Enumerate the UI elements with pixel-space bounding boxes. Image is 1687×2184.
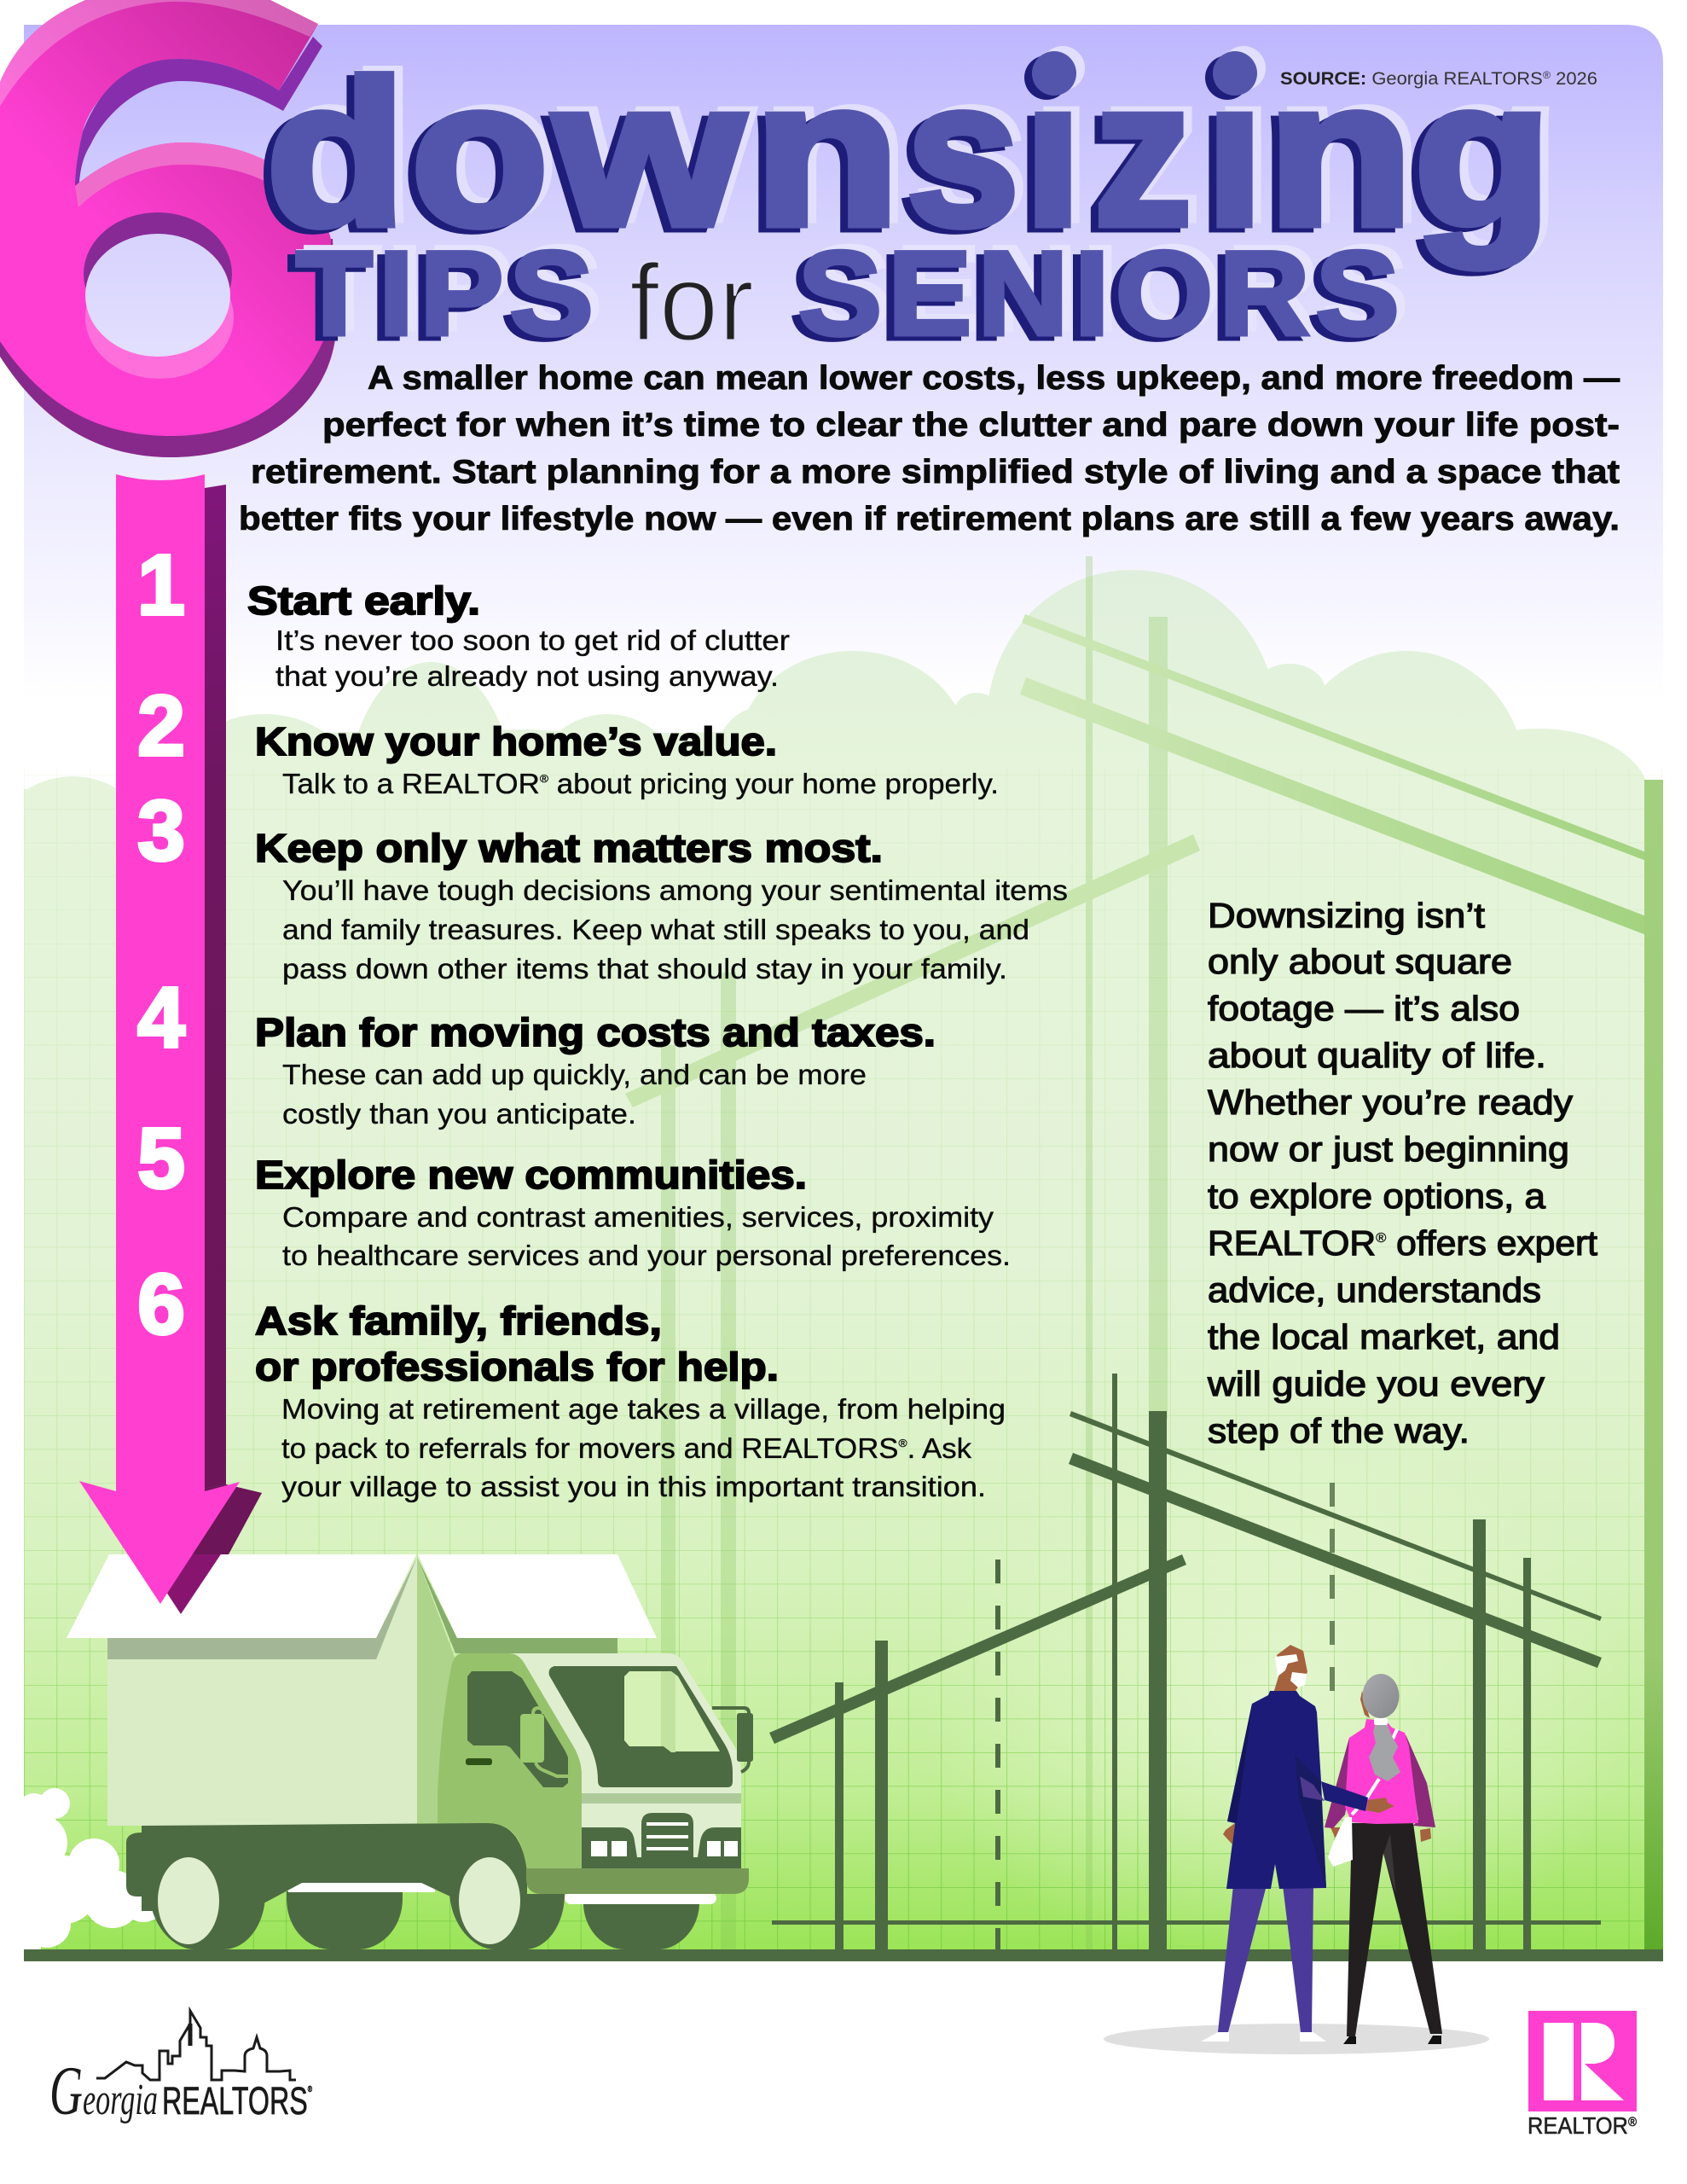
6 hole shading xyxy=(84,212,232,335)
numbers on arrow: 1 xyxy=(137,537,185,633)
tip 3: pass down other items that should stay in your family. xyxy=(282,953,1007,985)
tip 4 xyxy=(255,1010,936,1130)
tip 2: about pricing your home properly. xyxy=(548,768,999,799)
source line: ® xyxy=(1543,69,1551,81)
title: downsizing: i xyxy=(1206,38,1263,269)
left hand xyxy=(1223,1823,1235,1844)
title: downsizing: z xyxy=(1094,38,1191,269)
illustration: older woman xyxy=(1325,1674,1442,2044)
legs xyxy=(1218,1885,1267,2032)
scrunchie xyxy=(1374,1718,1388,1725)
intro paragraph: retirement. Start planning for a more simplified style of living and a space that xyxy=(251,454,1620,491)
box right face xyxy=(417,1557,455,1823)
closing paragraph: offers expert xyxy=(1386,1223,1598,1263)
title: downsizing: o xyxy=(411,38,548,269)
tip 6: . Ask xyxy=(907,1432,972,1464)
closing paragraph xyxy=(1207,896,1598,1450)
numbers on arrow: 2 xyxy=(137,678,185,774)
title: downsizing: n xyxy=(1267,38,1413,269)
box flaps xyxy=(67,1554,416,1638)
closing paragraph: only about square xyxy=(1208,942,1512,981)
illustration: older man xyxy=(1201,1645,1394,2042)
cab side xyxy=(438,1653,582,1868)
tip 2: Talk to a REALTOR xyxy=(282,768,525,799)
dashed frame line right xyxy=(1330,1483,1335,1693)
numbers on arrow: 4 xyxy=(137,970,185,1066)
tip 1 xyxy=(247,578,790,692)
box right shade xyxy=(417,1557,617,1653)
front wheel xyxy=(449,1857,565,1949)
coat shading xyxy=(1227,1704,1252,1822)
tip 3: Keep only what matters most. xyxy=(255,826,883,870)
closing paragraph: Whether you’re ready xyxy=(1208,1083,1574,1122)
rear wheel xyxy=(149,1857,265,1949)
tip 2: ® xyxy=(540,772,548,785)
tip 5: Compare and contrast amenities, services, proximity xyxy=(282,1201,994,1233)
6 shadow xyxy=(0,239,336,457)
closing paragraph: footage — it’s also xyxy=(1208,989,1520,1028)
windshield glass xyxy=(624,1671,720,1751)
heels xyxy=(1343,2036,1356,2044)
skyline xyxy=(96,2011,296,2080)
title: TIPS for SENIORS: SENIORS xyxy=(798,226,1406,360)
tip 6: or professionals for help. xyxy=(255,1345,779,1389)
downward arrow xyxy=(79,474,262,1614)
side window xyxy=(467,1671,568,1787)
intro paragraph: A smaller home can mean lower costs, less upkeep, and more freedom — xyxy=(368,360,1620,397)
chassis xyxy=(126,1823,527,1911)
dark house frame xyxy=(769,1374,1602,1957)
6 body xyxy=(0,0,332,436)
grille base xyxy=(582,1813,741,1869)
numbers on arrow xyxy=(137,537,185,1352)
intro paragraph: perfect for when it’s time to clear the clutter and pare down your life post- xyxy=(322,407,1620,444)
tip 1: It’s never too soon to get rid of clutter xyxy=(275,624,790,656)
side mirror xyxy=(712,1708,753,1772)
ground shadow under couple xyxy=(1104,2024,1489,2054)
logo: Georgia REALTORS xyxy=(49,2011,312,2129)
tip 3: You’ll have tough decisions among your sentimental items xyxy=(282,874,1068,906)
arm xyxy=(1321,1781,1368,1811)
front band xyxy=(582,1793,741,1804)
source line: SOURCE: Georgia REALTORS xyxy=(1280,69,1535,89)
box left face xyxy=(107,1557,417,1826)
6 top highlight xyxy=(0,0,318,107)
title: downsizing: n xyxy=(754,38,900,269)
closing paragraph: ® xyxy=(1376,1231,1387,1246)
tip 3 xyxy=(255,826,1068,985)
windshield xyxy=(549,1666,733,1787)
arrow shaft and head xyxy=(79,474,240,1604)
radiator stripes xyxy=(646,1822,688,1850)
tip 4: These can add up quickly, and can be more xyxy=(282,1059,867,1090)
logo: REALTOR mark: REALTOR xyxy=(1528,2112,1638,2139)
rear tyres xyxy=(287,1891,403,1949)
bumper xyxy=(526,1868,749,1894)
under strips xyxy=(288,1883,435,1892)
logo: REALTOR mark: ® xyxy=(1628,2115,1637,2129)
tip 6 xyxy=(255,1298,1006,1502)
panel: green cloud landscape xyxy=(0,570,1663,1949)
closing paragraph: step of the way. xyxy=(1208,1411,1470,1450)
large numeral 6 xyxy=(0,0,336,457)
title: downsizing: g xyxy=(1414,38,1551,269)
source line: 2026 xyxy=(1551,69,1597,89)
truck illustration xyxy=(67,1554,753,1949)
closing paragraph: advice, understands xyxy=(1208,1270,1541,1310)
ponytail xyxy=(1369,1725,1400,1781)
hair xyxy=(1275,1654,1298,1676)
pants xyxy=(1347,1823,1442,2036)
tip 6: Moving at retirement age takes a village, from helping xyxy=(281,1393,1006,1425)
sleeves xyxy=(1325,1738,1356,1828)
tip 5 xyxy=(255,1153,1011,1271)
6 bowl highlight xyxy=(75,142,266,207)
tip 5: Explore new communities. xyxy=(255,1153,807,1197)
door handle xyxy=(466,1758,492,1765)
tip 1: Start early. xyxy=(247,578,480,623)
closing paragraph: REALTOR xyxy=(1208,1223,1370,1263)
logo: REALTOR mark xyxy=(1528,2011,1637,2139)
tip 1: that you’re already not using anyway. xyxy=(275,660,779,692)
headlights xyxy=(591,1841,738,1856)
title: TIPS for SENIORS: for xyxy=(629,242,754,364)
6 hole xyxy=(85,234,230,357)
tip 2: Know your home’s value. xyxy=(255,719,777,764)
title: TIPS for SENIORS: TIPS xyxy=(296,226,600,360)
face sliver xyxy=(1360,1691,1370,1718)
neck and head xyxy=(1273,1645,1307,1693)
halo behind couple xyxy=(921,1433,1638,1979)
faded house frame xyxy=(625,556,1663,1949)
intro paragraph xyxy=(239,360,1620,537)
tip 6: to pack to referrals for movers and REALTORS xyxy=(281,1432,867,1464)
logo: Georgia REALTORS: REALTORS xyxy=(162,2079,365,2123)
coat xyxy=(1226,1691,1326,1889)
exhaust smoke xyxy=(0,1788,167,1949)
closing paragraph: Downsizing isn’t xyxy=(1208,896,1486,935)
right hand xyxy=(1420,1828,1431,1842)
box shaded top xyxy=(107,1638,417,1659)
tip 6: ® xyxy=(899,1437,907,1449)
closing paragraph: now or just beginning xyxy=(1208,1130,1569,1169)
tip 6: your village to assist you in this important transition. xyxy=(281,1471,986,1502)
closing paragraph: the local market, and xyxy=(1208,1317,1560,1356)
6 counter band xyxy=(75,37,322,186)
tip 4: costly than you anticipate. xyxy=(282,1098,636,1130)
shoes xyxy=(1201,2032,1229,2042)
strap xyxy=(1352,1729,1397,1815)
numbers on arrow: 3 xyxy=(137,783,185,879)
closing paragraph: to explore options, a xyxy=(1208,1176,1545,1216)
tip 2 xyxy=(255,719,999,799)
cab front xyxy=(509,1653,741,1870)
tip 3: and family treasures. Keep what still speaks to you, and xyxy=(282,914,1029,945)
logo: Georgia REALTORS: Georgia xyxy=(49,2052,158,2129)
hand on jacket xyxy=(1366,1798,1394,1813)
title: downsizing: d xyxy=(266,38,406,269)
head xyxy=(1363,1674,1399,1718)
tip 6: Ask family, friends, xyxy=(255,1298,662,1343)
closing paragraph: will guide you every xyxy=(1207,1364,1545,1403)
logo: Georgia REALTORS: ® xyxy=(308,2085,312,2094)
beard xyxy=(1290,1672,1307,1687)
numbers on arrow: 5 xyxy=(137,1111,185,1206)
dashed frame line left xyxy=(995,1560,1000,1949)
intro paragraph: better fits your lifestyle now — even if retirement plans are still a few years away. xyxy=(239,501,1620,537)
bag xyxy=(1328,1817,1353,1867)
tip 5: to healthcare services and your personal preferences. xyxy=(282,1240,1011,1271)
title: downsizing xyxy=(266,38,1551,269)
tip 4: Plan for moving costs and taxes. xyxy=(255,1010,936,1054)
numbers on arrow: 6 xyxy=(137,1257,185,1352)
jacket xyxy=(1345,1719,1418,1824)
ground line xyxy=(24,1949,1663,1961)
title: downsizing: i xyxy=(1024,38,1081,269)
door mirror xyxy=(520,1708,568,1776)
title: downsizing: w xyxy=(554,38,745,269)
closing paragraph: about quality of life. xyxy=(1208,1036,1546,1075)
grid lines xyxy=(24,768,1663,1949)
title: TIPS for SENIORS xyxy=(296,226,1406,364)
arrow shadow xyxy=(205,485,226,1489)
left hand xyxy=(1330,1827,1343,1843)
title: downsizing: s xyxy=(907,38,1019,269)
